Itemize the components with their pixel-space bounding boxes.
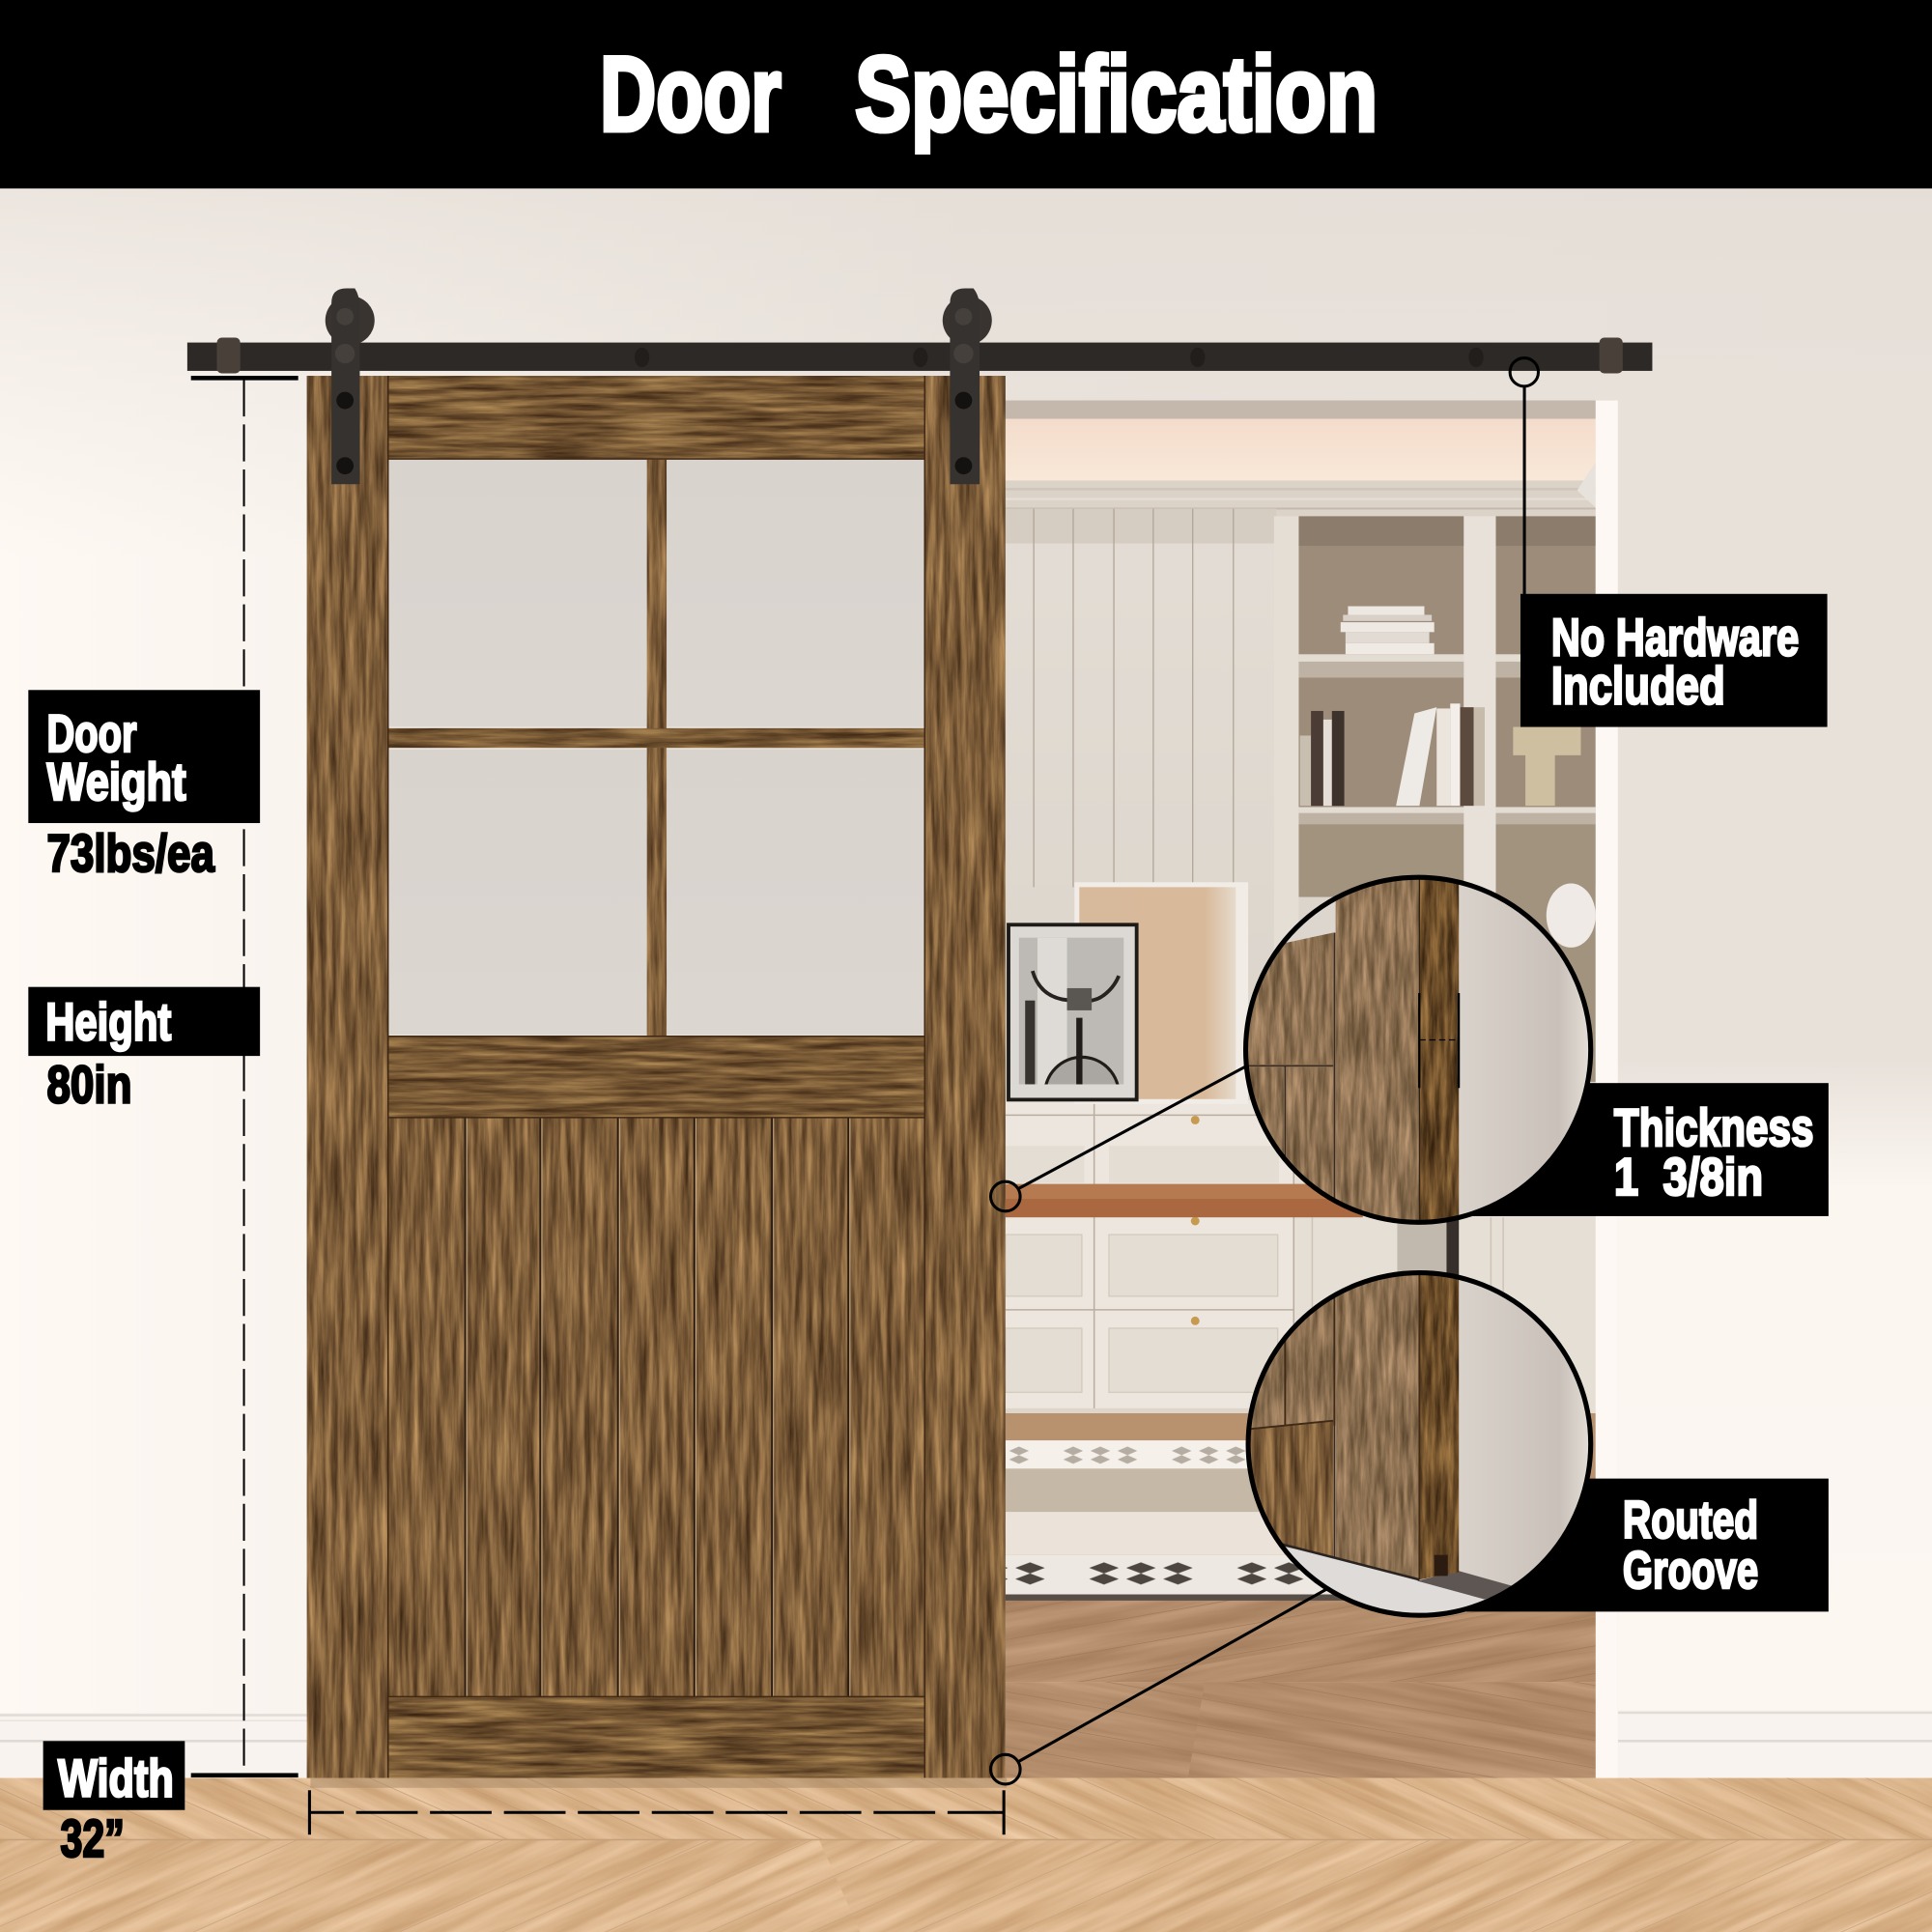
label: height [28,987,260,1056]
rail bolts [635,348,1484,367]
label: width: Width [58,1748,174,1808]
right hanger [943,288,992,484]
label: door weight [28,690,260,823]
callout: thickness: 1 3/8in [1614,1147,1763,1207]
books stack [1341,607,1435,654]
left stile [307,376,388,1778]
white vase [1547,884,1596,948]
bookshelf [1274,516,1596,1132]
door shadow [310,1778,1007,1788]
upright books left [1300,711,1345,806]
label: height: Height [45,992,171,1052]
title bar [0,0,1932,188]
callout: no hardware: Included [1551,655,1725,715]
barn door [307,376,1007,1788]
rail [187,343,1652,371]
cabinets [1006,1100,1293,1417]
left stopper [216,337,241,373]
opening reveal [1006,401,1615,419]
bottom rail [388,1696,924,1778]
panelled wall [1006,509,1276,1113]
door jamb [1596,401,1618,1778]
value: width: 32” [60,1808,125,1868]
callout: routed groove: Groove [1623,1540,1758,1600]
callout: routed groove: Routed [1623,1490,1758,1549]
callout: routed groove [991,1479,1829,1784]
title heading: Door [600,36,781,154]
crown molding [1006,462,1596,516]
muntins [388,460,924,1037]
height dimension line [191,376,298,1777]
ceiling glow [1006,419,1596,480]
thickness marks [1418,993,1460,1088]
vertical planks [388,1118,924,1696]
bicycle photo frame [1007,923,1139,1101]
label: door weight: Door [46,703,137,763]
glass panes [389,460,924,1035]
left hanger [326,288,375,484]
callout: thickness: Thickness [1614,1097,1814,1157]
zoom detail circle: door thickness [1244,876,1592,1224]
label: width [43,1741,185,1810]
width dimension line [308,1790,1006,1834]
sliding track hardware [187,288,1652,484]
value: height: 80in [46,1055,131,1115]
callout: no hardware [1510,358,1828,727]
right stile [925,376,1006,1778]
inner floor [1006,1413,1597,1778]
upright books right [1396,703,1485,806]
callout: thickness [991,1065,1829,1216]
top rail [388,376,924,458]
zoom detail circle: routed groove [1246,1271,1593,1616]
label: door weight: Weight [46,752,186,811]
patterned rug [1006,1440,1363,1601]
title heading [600,36,1378,154]
room seen through opening [1006,401,1618,1778]
right stopper [1600,337,1623,373]
value: door weight: 73lbs/ea [46,823,214,883]
wooden shelf [1006,1184,1363,1217]
callout: no hardware: No Hardware [1551,608,1799,668]
beige art frame [1074,882,1248,1104]
lower right panelling [1293,1096,1596,1444]
table lamp [1513,727,1580,806]
wood floor [0,1778,1932,1932]
title heading: Specification [855,36,1378,154]
lock rail [388,1037,924,1118]
